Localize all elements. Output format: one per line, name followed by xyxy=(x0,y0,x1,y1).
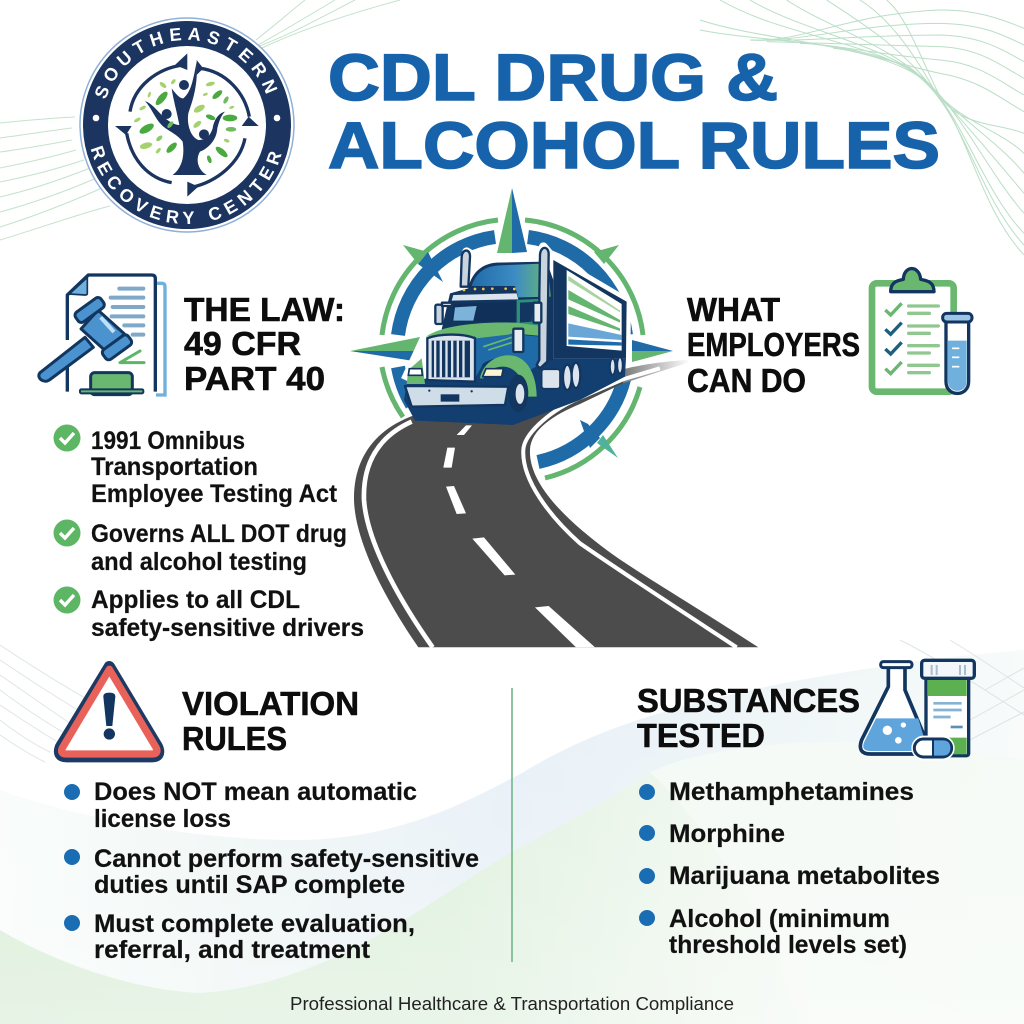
item 3 text xyxy=(91,586,364,642)
logo ring dots xyxy=(93,115,280,121)
bullet 4 xyxy=(639,910,655,926)
check icon 3 xyxy=(54,586,80,614)
item 1 text: Employee Testing Act xyxy=(91,480,338,508)
exhaust stacks and mirrors xyxy=(435,248,549,368)
heading: what employers can do: CAN DO xyxy=(687,362,806,399)
heading: violation rules: VIOLATION xyxy=(182,685,359,722)
item 3 text: referral, and treatment xyxy=(94,936,371,964)
item 1 text: license loss xyxy=(94,805,231,833)
compass emblem xyxy=(350,188,673,478)
item 2 text xyxy=(91,520,347,576)
logo emblem: tree, arrows and leaves xyxy=(115,53,259,197)
item 1 text: 1991 Omnibus xyxy=(91,427,245,455)
icon: clipboard and test tube xyxy=(872,269,972,393)
icon: warning triangle xyxy=(60,667,159,757)
heading: the law: 49 CFR xyxy=(184,325,301,362)
item 2 text xyxy=(94,845,479,899)
heading: the law: THE LAW: xyxy=(184,291,345,328)
list: the law xyxy=(54,424,364,642)
bullet 3 xyxy=(639,868,655,884)
bullet 3 xyxy=(64,915,80,931)
list: violation rules xyxy=(64,778,479,964)
item 3 text: Must complete evaluation, xyxy=(94,910,415,938)
item 4 text xyxy=(669,905,907,959)
heading: the law: PART 40 xyxy=(184,360,325,397)
title xyxy=(328,40,940,182)
check icon 1 xyxy=(54,424,80,452)
item 2 text: Governs ALL DOT drug xyxy=(91,520,347,548)
item 1 text: Transportation xyxy=(91,453,258,481)
item 3 text xyxy=(94,910,415,964)
bumper xyxy=(405,386,508,407)
truck xyxy=(404,247,627,425)
item 3 text: safety-sensitive drivers xyxy=(91,614,364,642)
decorative line pattern: left and top centre xyxy=(0,0,400,240)
footer: Professional Healthcare & Transportation Compliance xyxy=(290,994,734,1014)
title: ALCOHOL RULES xyxy=(328,108,940,182)
logo ring text: bottom: RECOVERY CENTER xyxy=(90,146,282,224)
bullet 2 xyxy=(64,849,80,865)
heading: substances tested: SUBSTANCES xyxy=(637,682,860,719)
heading: violation rules xyxy=(182,685,359,757)
icon: flask and pill bottle xyxy=(860,660,974,758)
list: substances tested xyxy=(639,778,940,959)
item 2 text: Cannot perform safety-sensitive xyxy=(94,845,479,873)
bullet 1 xyxy=(639,784,655,800)
heading: violation rules: RULES xyxy=(182,720,287,757)
logo ring text: top: SOUTHEASTERN xyxy=(95,28,278,98)
item 3 text: Marijuana metabolites xyxy=(669,862,940,890)
heading: substances tested xyxy=(637,682,860,754)
item 1 text xyxy=(91,427,338,508)
heading: what employers can do xyxy=(687,291,860,399)
trailer xyxy=(553,260,627,358)
check icon 2 xyxy=(54,520,80,546)
chassis xyxy=(404,358,626,425)
heading: what employers can do: EMPLOYERS xyxy=(687,326,860,363)
item 4 text: Alcohol (minimum xyxy=(669,905,890,933)
decorative line pattern: top right xyxy=(700,0,1024,255)
grille xyxy=(427,335,475,382)
logo: Southeastern Recovery Center xyxy=(79,17,295,233)
heading: substances tested: TESTED xyxy=(637,717,765,754)
road xyxy=(354,360,758,647)
icon: law document and gavel xyxy=(39,275,165,395)
item 1 text xyxy=(94,778,417,833)
divider xyxy=(511,688,513,962)
item 1 text: Does NOT mean automatic xyxy=(94,778,417,806)
decorative line pattern: lower corners xyxy=(0,640,1024,762)
item 3 text: Applies to all CDL xyxy=(91,586,300,614)
item 2 text: duties until SAP complete xyxy=(94,871,405,899)
item 2 text: Morphine xyxy=(669,820,785,848)
item 1 text: Methamphetamines xyxy=(669,778,914,806)
cab xyxy=(407,262,553,397)
item 4 text: threshold levels set) xyxy=(669,931,907,959)
bullet 1 xyxy=(64,784,80,800)
wheels xyxy=(508,357,623,412)
bullet 2 xyxy=(639,825,655,841)
item 2 text: and alcohol testing xyxy=(91,548,307,576)
heading: the law xyxy=(184,291,345,397)
heading: what employers can do: WHAT xyxy=(687,291,780,328)
title: CDL DRUG & xyxy=(328,40,778,114)
